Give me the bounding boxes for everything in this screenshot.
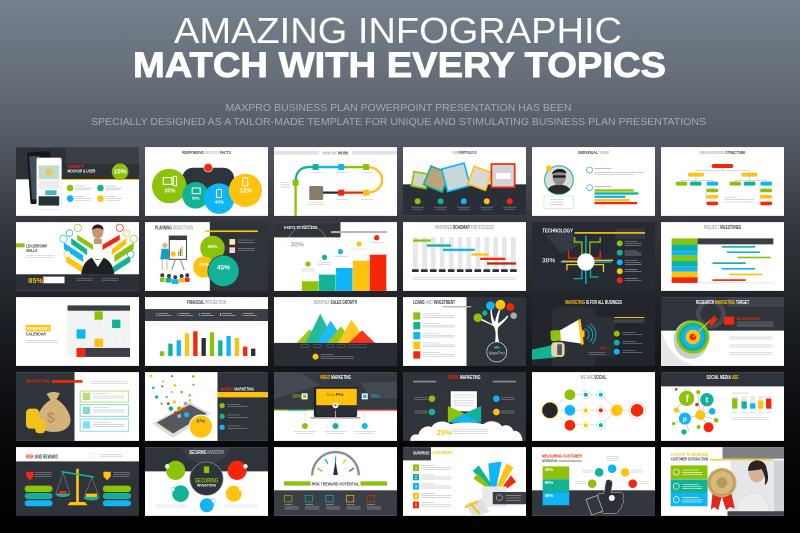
slide: project milestones (661, 222, 784, 291)
slide: proposed roadmap: PROVIDED ROADMAP FOR SUCCESS (435, 225, 494, 231)
slide: video marketing: VIDEO MARKETING (320, 375, 351, 381)
slide: reminder calendar: CALENDAR (26, 331, 46, 336)
slide: financial projection (145, 297, 268, 366)
slide: securing investor (145, 447, 268, 516)
businessman (81, 224, 114, 274)
slide: loyalty customer satisfaction (661, 447, 784, 516)
slide: project milestones: PROJECT MILESTONES (704, 225, 741, 231)
slide: social media use: SOCIAL MEDIA USE (707, 375, 739, 381)
slide: benefits of marketing (16, 372, 139, 441)
slide: tablet mockup and users: MOCKUP & USER (68, 169, 96, 174)
slide: loyalty customer satisfaction: CUSTOMER SATISFACTION (671, 457, 709, 462)
gift box and stars (465, 461, 516, 518)
subtitle: SPECIALLY DESIGNED AS A TAILOR-MADE TEMPLATE FOR UNIQUE AND STIMULATING BUSINESS PLAN PRESENTATIONS (91, 116, 706, 128)
money tree: MaxPro (489, 351, 505, 356)
device circles: 12% (239, 188, 252, 195)
audience (160, 273, 190, 284)
pills (25, 486, 131, 506)
slide: risk reward potential (274, 447, 397, 516)
satisfaction circles (588, 464, 637, 488)
slide: reminder calendar (16, 297, 139, 366)
social circles: f (686, 394, 690, 405)
objective circles: 45% (217, 265, 230, 272)
slide: social media use (661, 372, 784, 441)
slide: leadership skills: LEADERSHIP (26, 243, 47, 248)
envelope (448, 391, 481, 423)
central badge: INVESTORS (197, 484, 217, 488)
slide: marketing is for all business: 75% (599, 347, 607, 351)
slide: technology: 30% (542, 258, 555, 265)
gauge (312, 452, 359, 475)
device circles: 55% (192, 195, 200, 200)
title line 1: AMAZING INFOGRAPHIC (174, 10, 622, 51)
skill bars (594, 189, 638, 204)
slide: surprise customers: SURPRISE (413, 450, 430, 455)
numbered squares (413, 464, 419, 508)
thumbs up (586, 480, 624, 515)
social circles (672, 388, 719, 435)
slide: marketing is for all business (532, 300, 655, 366)
slide: email marketing (403, 372, 526, 441)
slide: research marketing target: RESEARCH MARKETING TARGET (696, 300, 750, 306)
laptop: Max (327, 392, 336, 397)
target and dart (674, 315, 718, 359)
numbered squares: 3 (415, 484, 418, 489)
slide: video marketing (274, 372, 397, 441)
slide: research marketing target (661, 297, 784, 366)
slide: mobile marketing (145, 372, 268, 441)
numbered squares: 2 (415, 475, 418, 480)
side stats: 25% (292, 393, 302, 398)
slide: portfolio (403, 147, 526, 216)
slide: measuring customer satisfaction: SATISFACTION (542, 459, 557, 463)
megaphone (532, 319, 596, 360)
green title bar: RISK / REWARD POTENTIAL (312, 481, 359, 487)
slide: organisation structure (661, 147, 784, 216)
bar chart (160, 331, 255, 356)
slide: reminder calendar: REMINDER (27, 326, 50, 332)
circuit icon (561, 235, 613, 284)
central badge: SECURING (195, 478, 218, 485)
slide: surprise customers (403, 447, 526, 516)
satellite circles (165, 461, 248, 512)
step markers (305, 235, 379, 267)
device circles: 35% (164, 189, 176, 195)
objective circles: 45% (199, 262, 209, 268)
percentage badge: 15% (114, 168, 127, 175)
slide: leadership skills (16, 222, 139, 291)
slide: risk and reward: RISK AND REWARD (26, 454, 58, 460)
money bag: $ (47, 411, 55, 427)
list icons (413, 312, 420, 359)
slide: surprise customers: CUSTOMERS (432, 450, 453, 456)
slide: how we work (274, 147, 397, 216)
social network nodes (542, 389, 645, 431)
slide: research marketing target: MARKETING (737, 316, 761, 321)
objective circles (193, 236, 239, 287)
slide: measuring customer satisfaction (532, 447, 655, 516)
slide: email marketing: 25% (437, 428, 452, 437)
numbered squares: 1 (415, 465, 418, 470)
slide: email marketing: EMAIL MARKETING (449, 375, 480, 381)
stat panels: 25% (545, 467, 553, 472)
slide: planning objectives (145, 222, 268, 291)
balance scale (55, 469, 99, 505)
slide: how we work: HOW WE WORK (323, 150, 349, 156)
slide: portfolio: OUR PORTFOLIO 10 (453, 150, 477, 156)
list markers (219, 403, 225, 430)
slide: monthly sales growth (274, 297, 397, 366)
title line 2: MATCH WITH EVERY TOPICS (133, 46, 666, 85)
calendar (68, 305, 130, 357)
gold medal (707, 468, 736, 510)
milestone rows (672, 238, 698, 283)
benefit boxes (80, 391, 128, 431)
portrait (545, 165, 573, 194)
slide: loans and investment: LOANS AND INVESTMENT (413, 300, 456, 306)
slide: securing investor: SECURING INVESTOR (189, 450, 224, 456)
slide: responsive devices facts (145, 147, 268, 216)
device circles (152, 169, 262, 214)
slide: leadership skills: SKILLS (26, 248, 37, 253)
numbered squares: 4 (415, 493, 418, 498)
stat panels: 60% (545, 480, 553, 485)
numbered squares: 5 (415, 503, 418, 508)
list markers (429, 395, 500, 415)
outlined icons (285, 495, 374, 502)
bar chart (732, 396, 771, 409)
cloud (410, 421, 523, 441)
smartphone: 87% (197, 419, 205, 424)
milestone bars (713, 246, 771, 281)
3D bar chart (302, 253, 386, 291)
85 percent: 85% (28, 276, 43, 285)
dark tag (493, 492, 526, 504)
subtitle: MAXPRO BUSINESS PLAN POWERPOINT PRESENTATION HAS BEEN (226, 102, 572, 114)
slide: we are social: WE ARE SOCIAL (581, 375, 607, 381)
slide: individual team: INDIVIDUAL TEAM (578, 150, 609, 156)
list markers (614, 331, 620, 355)
social circles: p (683, 416, 687, 423)
slide: planning objectives: PLANNING OBJECTIVES (155, 225, 193, 231)
slide: individual team (532, 147, 655, 216)
slide heading: SMETT (68, 164, 84, 170)
slide: 5 keys to success: 30% (291, 241, 304, 248)
slide: measuring customer satisfaction: MEASURING CUSTOMER (542, 454, 582, 460)
stat panels (543, 466, 569, 505)
side stats: 75% (370, 393, 380, 398)
slide: we are social (532, 372, 655, 441)
laptop (311, 387, 360, 419)
tilted portfolio cards (411, 163, 515, 192)
floating app dots (150, 375, 195, 418)
slide: proposed roadmap (403, 222, 526, 291)
slide: responsive devices facts: RESPONSIVE DEVICES FACTS (182, 150, 231, 156)
laptop: Pro (336, 392, 344, 397)
slide: tablet mockup and users (16, 147, 139, 216)
slide: technology (532, 222, 655, 284)
shield icons (26, 472, 111, 480)
slide: 5 keys to success: 5 KEYS TO SUCCESS (284, 225, 318, 231)
slide: financial projection: FINANCIAL PROJECTION (187, 300, 226, 306)
slide: technology: TECHNOLOGY (542, 228, 573, 234)
slide: benefits of marketing: MARKETING (26, 379, 50, 385)
slide: loans and investment (403, 297, 526, 366)
slide: 5 keys to success (274, 222, 397, 291)
list markers (617, 240, 623, 283)
ribbon icons (60, 224, 137, 258)
feature markers (302, 423, 368, 429)
mountain chart (297, 314, 375, 343)
slide: marketing is for all business: MARKETING IS FOR ALL BUSINESS (565, 300, 622, 306)
social circles: t (705, 395, 708, 405)
gantt bars (413, 239, 516, 265)
slide: organisation structure: ORGANISATION STRUCTURE (700, 150, 746, 156)
objective circles: 45% (208, 244, 218, 250)
central badge (190, 462, 223, 495)
slide: monthly sales growth: MONTHLY SALES GROWTH (314, 300, 357, 306)
presenter and easel (160, 236, 187, 270)
side stats (292, 393, 380, 399)
org chart nodes (676, 164, 772, 205)
process path (293, 164, 382, 216)
slide: risk and reward (16, 447, 139, 516)
arrow ribbons (64, 235, 134, 273)
slide: loyalty customer satisfaction: LOYALTY TO INCREASE (671, 452, 709, 458)
slide: mobile marketing: MOBILE MARKETING (221, 387, 254, 393)
feature rows (671, 465, 708, 506)
photo of woman (727, 460, 784, 516)
stat panels: 40% (545, 493, 553, 498)
device circles: 45% (215, 200, 224, 205)
tablet devices (27, 151, 62, 210)
